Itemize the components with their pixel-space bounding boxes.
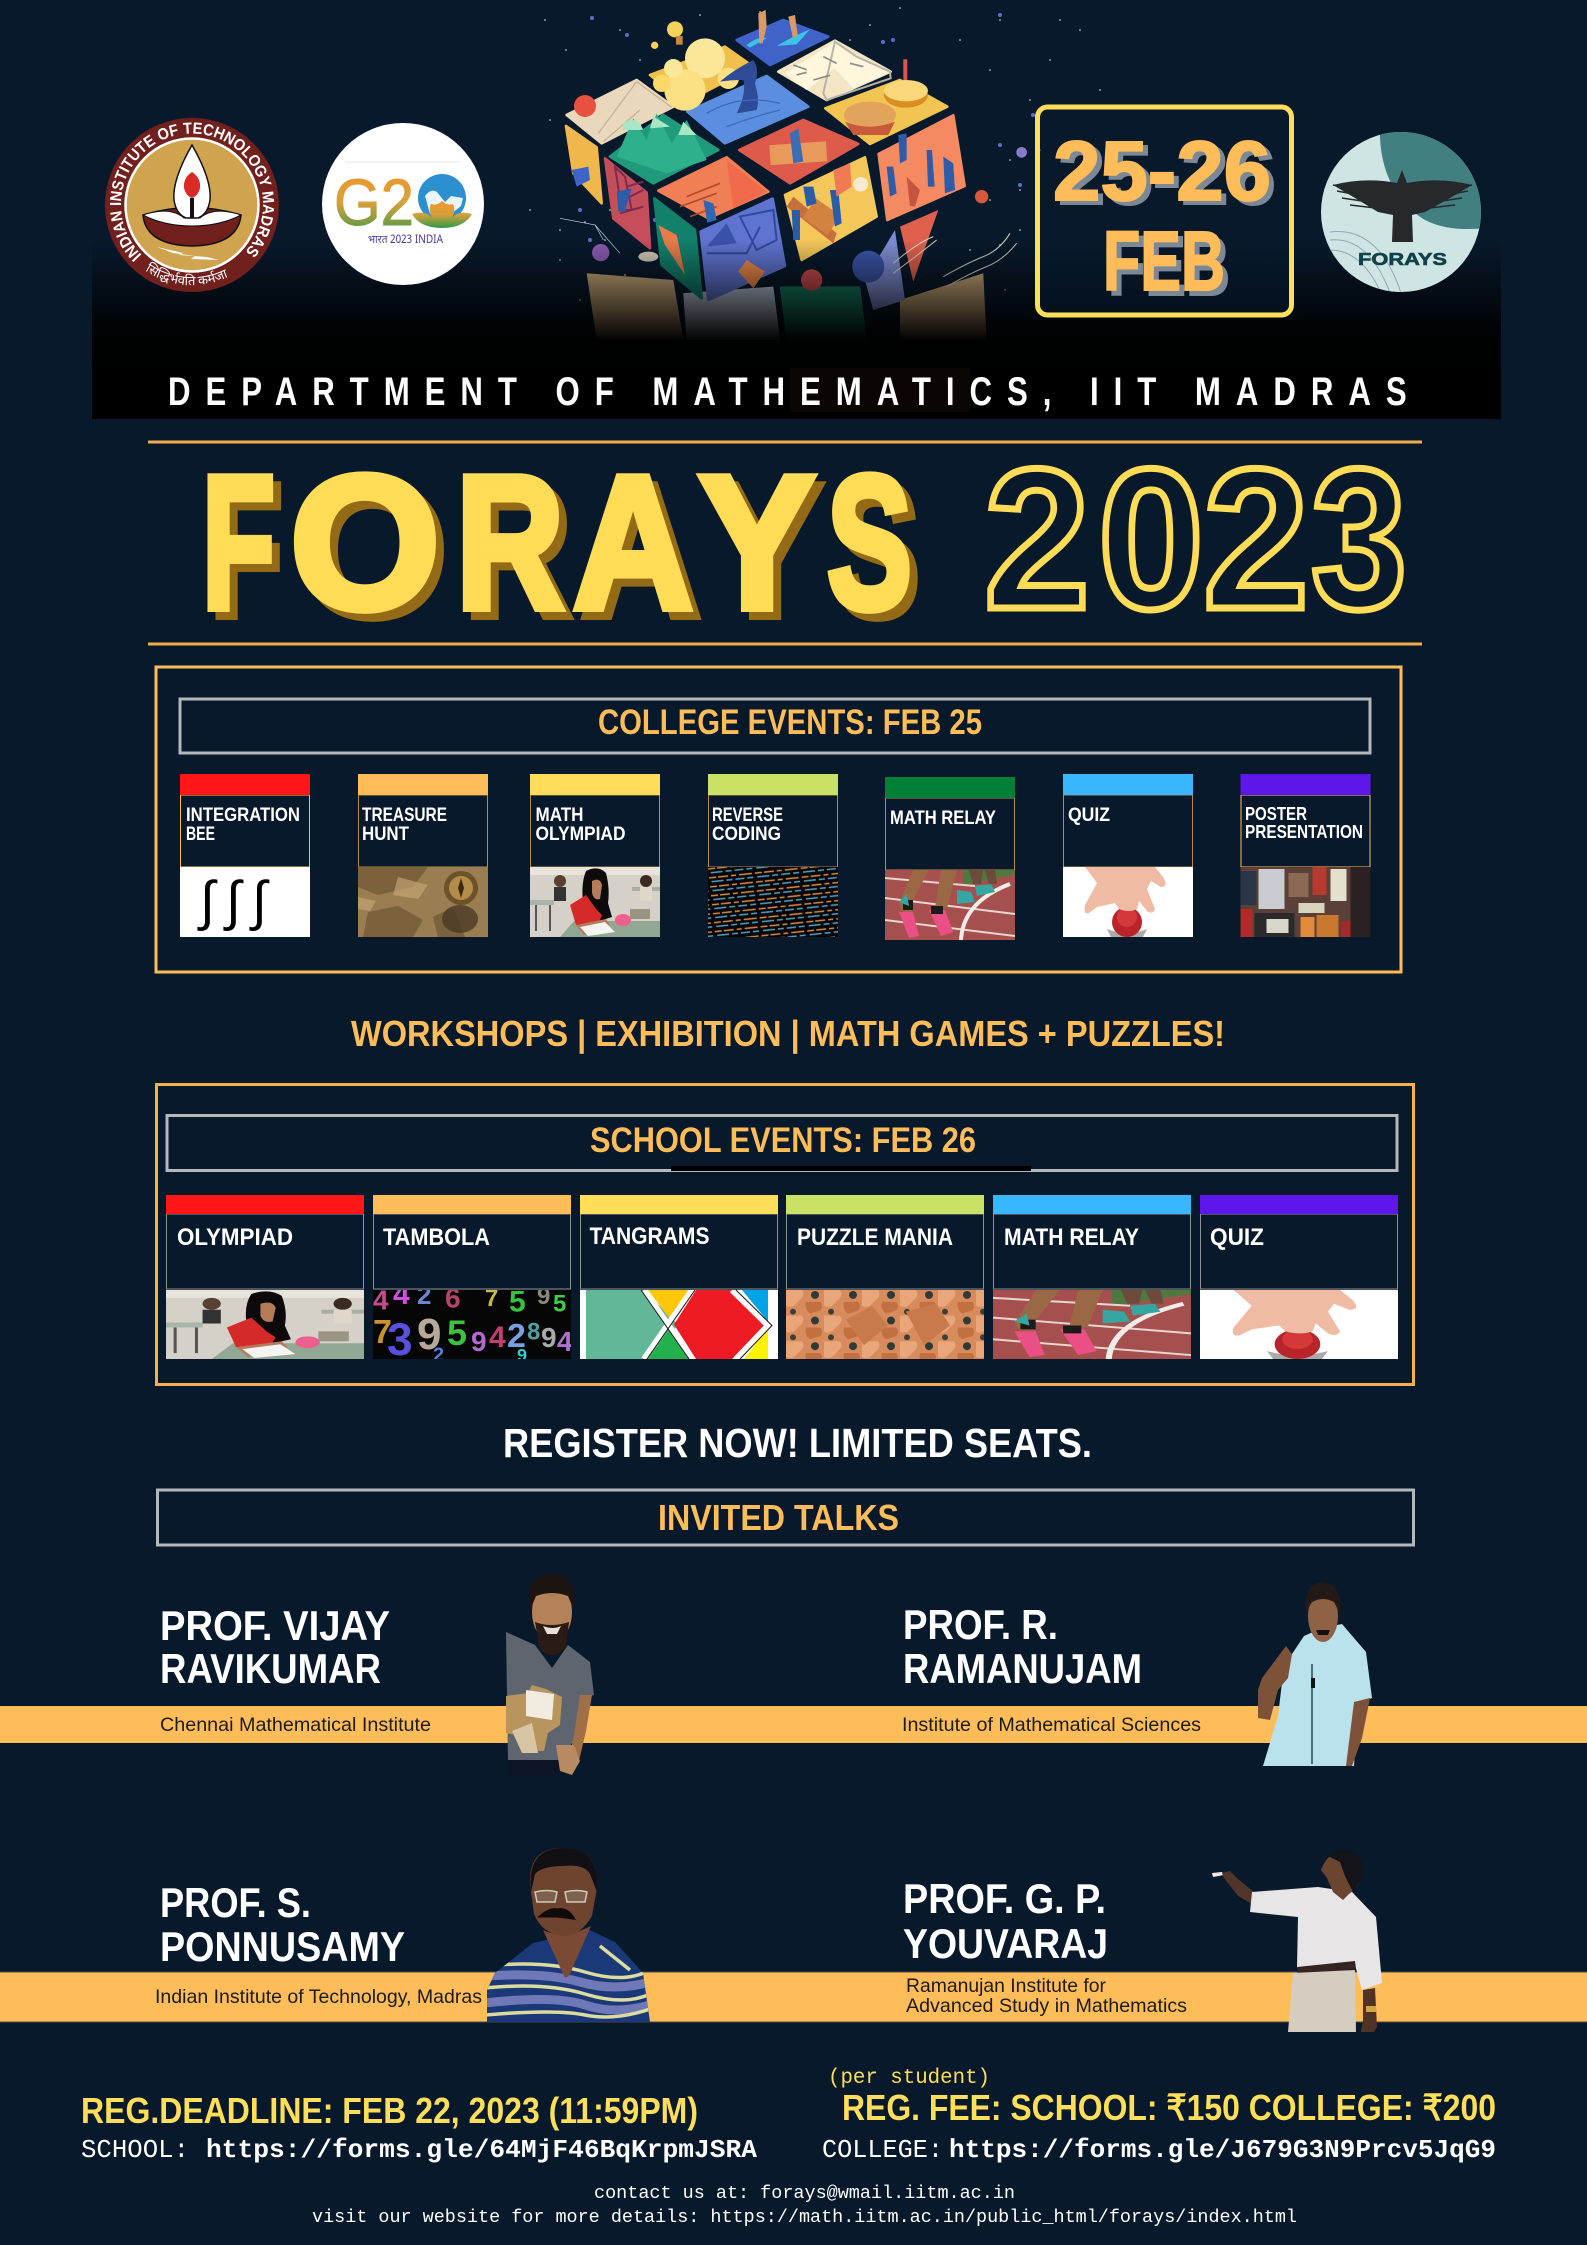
- speaker: S. Ponnusamy: [155, 1848, 650, 2022]
- invited talks heading box: [158, 1490, 1414, 1545]
- card: quiz: QUIZ: [1068, 804, 1110, 826]
- title 2023: 0: [1098, 428, 1204, 651]
- card: treasure hunt: [358, 774, 488, 937]
- school registration link: SCHOOL:: [81, 2135, 189, 2165]
- title shadow: F: [210, 445, 283, 657]
- logo: IIT Madras: [105, 118, 279, 292]
- per student note: (per student): [828, 2067, 990, 2090]
- logo caption: भारत 2023 INDIA: [368, 233, 444, 248]
- dark gradient over header: [92, 240, 1501, 419]
- school registration link: https://forms.gle/64MjF46BqKrpmJSRA: [206, 2135, 757, 2165]
- card: tambola: [373, 1195, 573, 1366]
- title 2023: [984, 428, 1407, 651]
- star field: [530, 8, 1100, 300]
- card: school math relay: MATH RELAY: [1004, 1224, 1139, 1251]
- card: poster presentation: [1240, 774, 1370, 937]
- school heading: SCHOOL EVENTS: FEB 26: [590, 1121, 976, 1160]
- card: math olympiad: [530, 774, 660, 937]
- card: school math relay: [993, 1195, 1191, 1359]
- card: olympiad: OLYMPIAD: [177, 1224, 293, 1251]
- logo wordmark: FORAYS: [1358, 249, 1447, 269]
- band: speakers row one: [0, 1706, 1587, 1743]
- speaker: Vijay Ravikumar: [160, 1573, 594, 1776]
- name: PROF. VIJAY: [160, 1602, 390, 1649]
- title 2023: 2: [1203, 428, 1309, 651]
- affiliation: Institute of Mathematical Sciences: [902, 1714, 1201, 1736]
- date text: FEB: [1103, 214, 1225, 308]
- card: tangrams: [580, 1195, 778, 1359]
- band: speakers row two: [0, 1972, 1587, 2022]
- name: [903, 1601, 1142, 1692]
- panel: school events: [156, 1084, 1414, 1384]
- title 2023: 2: [984, 428, 1090, 651]
- card: math olympiad: MATH: [536, 804, 584, 826]
- name: [903, 1875, 1108, 1967]
- affiliation: Ramanujan Institute for: [906, 1975, 1107, 1997]
- card: puzzle mania: [786, 1195, 984, 1359]
- title shadow: S: [835, 445, 920, 657]
- title shadow: R: [464, 445, 572, 657]
- date shadow: [1058, 128, 1276, 313]
- card: reverse coding: [708, 774, 838, 937]
- card: poster presentation: PRESENTATION: [1245, 822, 1363, 842]
- logo: G20: G2: [334, 165, 414, 239]
- card: tangrams: TANGRAMS: [590, 1223, 710, 1250]
- affiliation: Advanced Study in Mathematics: [906, 1995, 1187, 2017]
- college heading box: [180, 699, 1370, 753]
- illustration: math cube: [560, 10, 1027, 340]
- title FORAYS: [202, 437, 912, 649]
- name: PROF. R.: [903, 1601, 1058, 1648]
- speaker: R. Ramanujam: [902, 1582, 1372, 1766]
- name: PROF. G. P.: [903, 1875, 1106, 1922]
- card: treasure hunt: TREASURE: [362, 804, 447, 826]
- college heading: COLLEGE EVENTS: FEB 25: [598, 703, 982, 742]
- college registration link: COLLEGE:: [822, 2135, 943, 2165]
- card: olympiad: [166, 1195, 364, 1359]
- website line: visit our website for more details: https://math.iitm.ac.in/public_html/forays/index.html: [312, 2207, 1297, 2228]
- title rule bottom: [148, 642, 1422, 646]
- title FORAYS: R: [456, 437, 564, 649]
- invited talks heading: INVITED TALKS: [658, 1497, 899, 1538]
- affiliation: Indian Institute of Technology, Madras: [155, 1986, 482, 2008]
- photo: Ponnusamy: [485, 1848, 650, 2022]
- card: math olympiad: OLYMPIAD: [536, 823, 626, 845]
- logo ring text: INDIAN INSTITUTE OF TECHNOLOGY MADRAS: [110, 122, 274, 262]
- title FORAYS: A: [573, 437, 693, 649]
- title FORAYS: S: [827, 437, 912, 649]
- affiliation: [906, 1975, 1187, 2017]
- photo: Vijay: [506, 1573, 594, 1776]
- card: math relay: MATH RELAY: [890, 807, 996, 829]
- card: quiz: [1063, 774, 1193, 937]
- banner: workshops: WORKSHOPS | EXHIBITION | MATH GAMES + PUZZLES!: [351, 1013, 1225, 1055]
- date text: 25-26: [1053, 124, 1271, 218]
- card: school quiz: QUIZ: [1210, 1224, 1264, 1251]
- title shadow: O: [298, 445, 448, 657]
- title FORAYS: Y: [699, 437, 815, 649]
- school heading box: [167, 1116, 1397, 1170]
- name: PONNUSAMY: [160, 1923, 405, 1970]
- name: [160, 1879, 405, 1970]
- logo: Forays: [1321, 132, 1481, 292]
- date shadow: 25-26: [1058, 128, 1276, 222]
- logo: G20: [322, 123, 484, 285]
- card: integration bee: INTEGRATION: [186, 804, 300, 826]
- card: poster presentation: POSTER: [1245, 804, 1307, 824]
- card: integration bee: BEE: [186, 823, 215, 845]
- title 2023: 3: [1311, 428, 1407, 651]
- registration fee: REG. FEE: SCHOOL: ₹150 COLLEGE: ₹200: [842, 2087, 1496, 2128]
- logo motto: सिद्धिर्भवति कर्मजा: [146, 262, 228, 286]
- card: school quiz: [1200, 1195, 1398, 1359]
- photo: Ramanujam: [1258, 1582, 1372, 1766]
- card: math relay: [885, 777, 1015, 940]
- name: PROF. S.: [160, 1879, 311, 1926]
- title FORAYS: F: [202, 437, 275, 649]
- title shadow: [210, 445, 920, 657]
- speaker: G. P. Youvaraj: [903, 1850, 1382, 2032]
- name: RAVIKUMAR: [160, 1645, 381, 1692]
- title rule top: [148, 440, 1422, 444]
- title shadow: Y: [707, 445, 823, 657]
- card: reverse coding: REVERSE: [712, 804, 783, 826]
- card: puzzle mania: PUZZLE MANIA: [797, 1224, 953, 1251]
- header panel: [92, 8, 1501, 419]
- card: treasure hunt: HUNT: [362, 823, 409, 845]
- card: tambola: TAMBOLA: [383, 1224, 490, 1251]
- title shadow: A: [581, 445, 701, 657]
- name: YOUVARAJ: [903, 1920, 1108, 1967]
- department heading: DEPARTMENT OF MATHEMATICS, IIT MADRAS: [168, 369, 1407, 414]
- title FORAYS: O: [290, 437, 440, 649]
- affiliation: Chennai Mathematical Institute: [160, 1714, 431, 1736]
- card: reverse coding: CODING: [712, 823, 781, 845]
- college registration link: https://forms.gle/J679G3N9Prcv5JqG9: [949, 2135, 1496, 2165]
- photo: Youvaraj: [1212, 1850, 1382, 2032]
- date text: [1053, 124, 1271, 308]
- name: RAMANUJAM: [903, 1645, 1142, 1692]
- name: [160, 1602, 390, 1692]
- title: Forays 2023: [202, 428, 1407, 657]
- banner: register now: REGISTER NOW! LIMITED SEATS.: [503, 1420, 1092, 1466]
- registration deadline: REG.DEADLINE: FEB 22, 2023 (11:59PM): [81, 2090, 698, 2131]
- date shadow: FEB: [1108, 219, 1230, 313]
- contact line: contact us at: forays@wmail.iitm.ac.in: [594, 2183, 1015, 2204]
- card: integration bee: [180, 774, 310, 937]
- date box: [1038, 107, 1292, 315]
- panel: college events: [156, 667, 1401, 972]
